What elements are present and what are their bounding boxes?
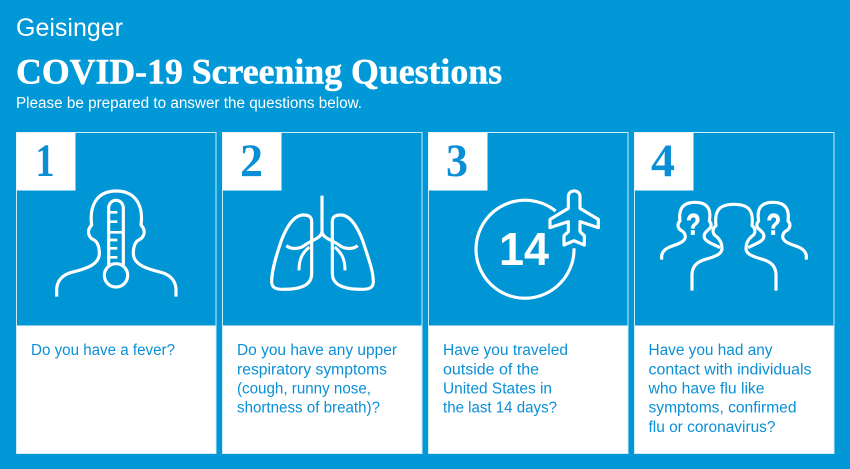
question 4 text	[647, 342, 812, 436]
icon: three people with question marks: ?	[766, 207, 781, 241]
number box 3: 3	[446, 135, 468, 187]
number box 3	[428, 132, 488, 190]
number box 2	[222, 132, 282, 190]
question 3 text: the last 14 days?	[443, 400, 557, 417]
question 2 text: shortness of breath)?	[237, 400, 380, 417]
question 1 text: Do you have a fever?	[31, 342, 175, 359]
question 3 text: outside of the	[443, 361, 539, 378]
number box 4: 4	[651, 135, 675, 187]
question 4 text: contact with individuals	[648, 361, 812, 378]
logo: Geisinger: Geisinger	[16, 14, 123, 42]
question 4 text: who have flu like	[647, 380, 764, 398]
icon: three people with question marks: ?	[686, 207, 701, 241]
number box 1	[16, 132, 76, 190]
panel: question 3	[428, 132, 628, 454]
number box 1: 1	[36, 135, 54, 187]
subtitle: Please be prepared to answer the questions below.	[16, 95, 362, 112]
question 3 text: United States in	[443, 380, 552, 398]
panel: question 1	[16, 132, 216, 454]
question 2 text: Do you have any upper	[237, 342, 397, 359]
icon: lungs	[272, 196, 373, 289]
number box 2: 2	[240, 135, 263, 187]
question 4 text: symptoms, confirmed	[648, 400, 796, 417]
question 4 text: Have you had any	[648, 342, 773, 359]
question 2 text: respiratory symptoms	[237, 361, 387, 378]
number box 4	[634, 132, 694, 190]
question 2 text	[237, 342, 397, 417]
question 3 text: Have you traveled	[443, 342, 568, 359]
question 4 text: flu or coronavirus?	[648, 419, 776, 436]
question 2 text: (cough, runny nose,	[237, 380, 371, 398]
panel: question 4	[634, 132, 834, 454]
icon: person with thermometer	[57, 191, 176, 297]
title: COVID-19 Screening Questions	[16, 52, 502, 92]
icon: 14 days and airplane: 14	[499, 223, 549, 275]
icon: three people with question marks	[662, 202, 806, 291]
question 3 text	[443, 342, 568, 417]
panel: question 2	[222, 132, 422, 454]
icon: 14 days and airplane	[476, 191, 598, 298]
